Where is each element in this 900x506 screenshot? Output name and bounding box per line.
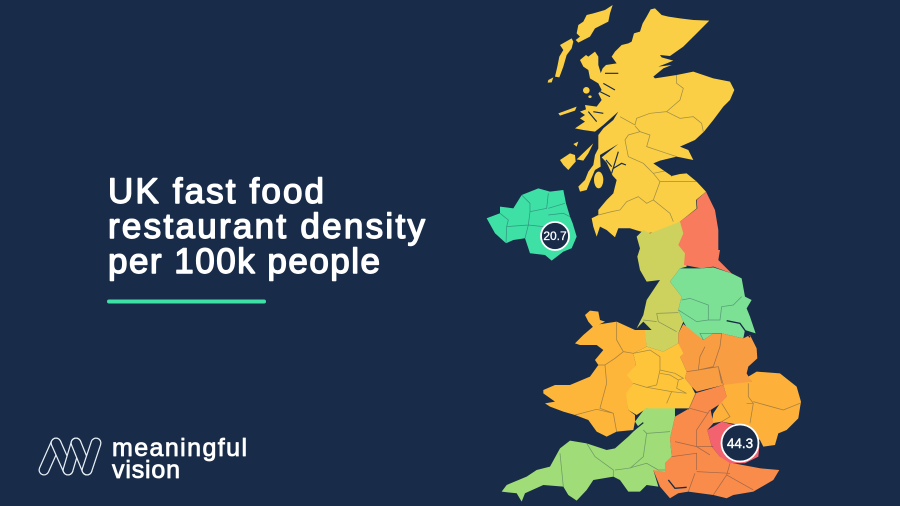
- logo: meaningful vision: [44, 434, 247, 484]
- region: South West: [502, 408, 675, 502]
- badge: London 44.3: [722, 424, 758, 462]
- logo wordmark: meaningful: [112, 434, 247, 462]
- title underline: [107, 300, 266, 304]
- Severn and Thames estuaries: [633, 321, 750, 488]
- region: Yorkshire: [670, 267, 756, 340]
- region: London: [707, 422, 759, 463]
- region: Scotland: [548, 5, 734, 237]
- title: restaurant density: [108, 207, 426, 246]
- title: UK fast food: [108, 172, 324, 211]
- title: per 100k people: [108, 242, 380, 281]
- internal county borders: [560, 297, 800, 495]
- region: East of England: [712, 372, 801, 447]
- logo wordmark: vision: [112, 456, 180, 484]
- title: [108, 172, 426, 281]
- Highland and Clyde sea lochs: [588, 73, 626, 173]
- region: South East: [653, 385, 779, 498]
- region: West Midlands: [625, 343, 696, 415]
- badge: Northern Ireland 20.7: [541, 222, 569, 250]
- region: North East: [678, 192, 732, 273]
- region: Anglesey: [585, 311, 605, 327]
- logo wordmark: [112, 434, 247, 484]
- badge: Northern Ireland 20.7: 20.7: [543, 229, 567, 243]
- England and Wales regions: [502, 192, 801, 502]
- region: Northern Ireland: [487, 188, 577, 261]
- logo mark: [44, 443, 96, 470]
- map of the UK: [487, 5, 801, 502]
- region: North West: [637, 222, 703, 352]
- region: East Midlands: [678, 324, 757, 392]
- region: Wales: [543, 322, 647, 437]
- badge: London 44.3: 44.3: [727, 436, 753, 451]
